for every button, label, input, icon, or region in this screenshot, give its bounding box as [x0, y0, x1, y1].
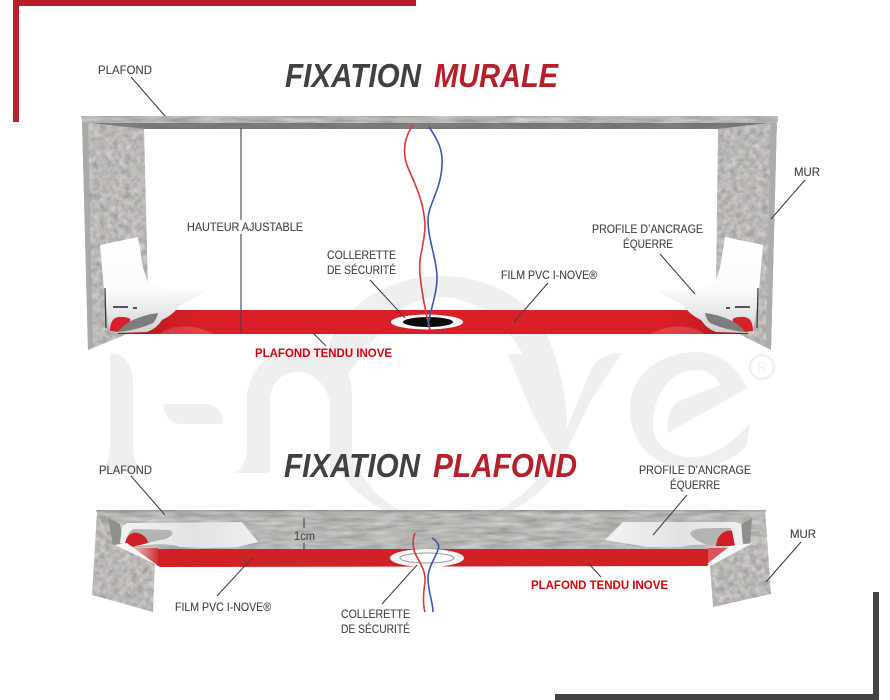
label: plafond tendu (top): PLAFOND TENDU INOVE — [255, 348, 392, 360]
label: film pvc (bottom) — [175, 558, 271, 614]
title: fixation murale — [285, 57, 559, 94]
label: plafond tendu (bottom): PLAFOND TENDU INOVE — [531, 580, 668, 592]
right wall — [716, 117, 777, 350]
label: plafond (top): PLAFOND — [98, 65, 152, 77]
left wall — [82, 120, 148, 350]
right anchor profile — [656, 237, 763, 333]
left wall — [92, 512, 155, 612]
label: collerette (bottom): DE SÉCURITÉ — [341, 623, 410, 636]
label: film pvc (top): FILM PVC I-NOVE® — [501, 270, 597, 282]
label: mur (top): MUR — [794, 167, 820, 179]
left anchor profile — [100, 237, 207, 333]
letter n — [233, 348, 372, 473]
red stretched film — [133, 548, 730, 567]
watermark logo: R — [757, 359, 767, 375]
left anchor profile — [115, 522, 258, 565]
corner frame: bottom right — [555, 592, 879, 700]
ceiling surface — [96, 510, 766, 549]
label: plafond tendu (top) — [255, 333, 392, 360]
letter o ring and v — [318, 276, 567, 514]
label: 1cm: 1cm — [294, 531, 315, 543]
diagram: ceiling fixing — [92, 509, 771, 612]
registered mark — [750, 355, 774, 379]
label: profile (top): ÉQUERRE — [623, 238, 673, 251]
label: mur (bottom): MUR — [790, 529, 816, 541]
label: profile (bottom) — [639, 465, 751, 535]
red stretched film — [118, 310, 748, 334]
title: fixation plafond — [284, 447, 577, 484]
label: profile (bottom): PROFILE D’ANCRAGE — [639, 465, 751, 477]
title: fixation plafond: FIXATION — [284, 447, 421, 484]
watermark logo — [100, 276, 774, 516]
safety collar — [390, 549, 464, 567]
wires — [405, 125, 442, 330]
label: plafond tendu (bottom) — [531, 563, 668, 592]
label: plafond (top) — [98, 65, 165, 116]
wires — [413, 533, 439, 612]
label: profile (bottom): ÉQUERRE — [670, 479, 720, 492]
label: plafond (bottom) — [99, 465, 165, 515]
ceiling slab — [81, 116, 778, 129]
letter i — [100, 354, 142, 472]
label: collerette (bottom): COLLERETTE — [341, 609, 410, 621]
label: profile (top) — [592, 224, 703, 294]
safety collar — [391, 314, 463, 330]
label: 1cm — [294, 518, 315, 549]
title: fixation plafond: PLAFOND — [433, 447, 577, 484]
label: collerette (top): DE SÉCURITÉ — [327, 264, 396, 277]
diagram: wall fixing — [81, 116, 778, 350]
right wall — [710, 509, 771, 607]
label: collerette (top) — [327, 250, 405, 318]
label: collerette (top): COLLERETTE — [327, 250, 396, 262]
title: fixation murale: MURALE — [434, 57, 559, 94]
hyphen — [163, 404, 223, 424]
label: plafond (bottom): PLAFOND — [99, 465, 152, 477]
label: hauteur ajustable: HAUTEUR AJUSTABLE — [187, 222, 303, 234]
corner frame: top left — [13, 0, 416, 122]
label: collerette (bottom) — [341, 565, 417, 636]
right anchor profile — [605, 522, 753, 565]
letter e — [630, 352, 750, 468]
label: mur (top) — [771, 167, 820, 219]
label: film pvc (top) — [501, 270, 597, 322]
label: mur (bottom) — [766, 529, 816, 582]
label: profile (top): PROFILE D’ANCRAGE — [592, 224, 703, 236]
title: fixation murale: FIXATION — [285, 57, 422, 94]
label: film pvc (bottom): FILM PVC I-NOVE® — [175, 602, 271, 614]
